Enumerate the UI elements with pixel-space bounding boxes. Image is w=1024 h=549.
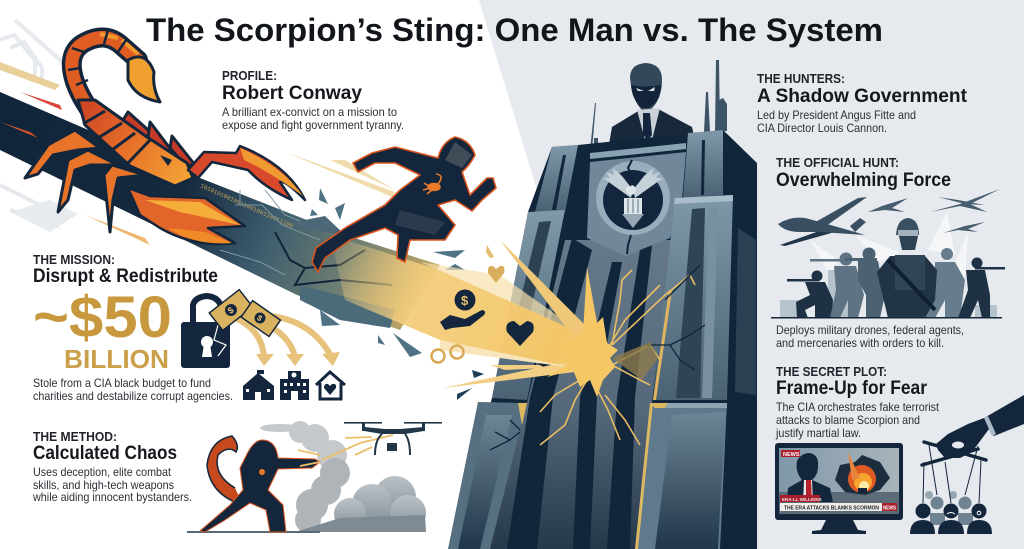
hunters label: THE HUNTERS: — [757, 71, 845, 86]
government seal — [596, 160, 670, 254]
explosion — [835, 452, 890, 495]
antennas — [590, 60, 727, 152]
bottom right block — [635, 403, 727, 549]
icon: school — [243, 370, 274, 400]
mission label: THE MISSION: — [33, 252, 115, 267]
hunt heading: Overwhelming Force — [776, 170, 951, 191]
tower impact cracks — [490, 265, 705, 450]
skyline — [780, 270, 997, 318]
broken shards — [295, 188, 484, 400]
lower third banner — [780, 495, 820, 502]
puppet crowd — [910, 491, 992, 534]
government tower — [448, 60, 757, 549]
icon: quadcopter drone — [344, 422, 442, 455]
tv monitor with news: THE ERA ATTACKS BLAMKS SCORMON — [784, 506, 879, 512]
hunters text block — [757, 71, 968, 135]
method description: while aiding innocent bystanders. — [32, 490, 192, 504]
left upper block — [535, 145, 578, 212]
hunters description: Led by President Angus Fitte and — [757, 108, 916, 122]
official hunt text block — [776, 155, 951, 191]
news tag — [781, 450, 800, 457]
gold rings — [432, 346, 464, 362]
tv monitor with news: NEWS — [883, 506, 896, 512]
scorpion upper claw — [188, 146, 305, 200]
decorative light circuit shapes — [0, 20, 78, 232]
profile description: A brilliant ex-convict on a mission to — [222, 105, 397, 119]
kneeling soldier left — [787, 270, 833, 318]
hunt label: THE OFFICIAL HUNT: — [776, 155, 899, 170]
hand and arm — [936, 395, 1024, 458]
mid soldier 2 — [845, 248, 885, 318]
puppet strings — [923, 445, 981, 503]
scorpion — [25, 30, 305, 244]
gold energy beam — [330, 235, 590, 388]
smoke cloud — [187, 421, 426, 533]
scorpion legs — [25, 112, 195, 232]
mission description: charities and destabilize corrupt agencies. — [33, 389, 233, 403]
hunters description: CIA Director Louis Cannon. — [757, 121, 887, 135]
mission description: Stole from a CIA black budget to fund — [33, 376, 211, 390]
icon: money bills — [209, 290, 280, 337]
icon: arrows to charities — [235, 315, 340, 366]
ground line — [771, 317, 1002, 318]
anchor — [787, 453, 833, 502]
tower dark mass — [448, 130, 757, 549]
scorpion lower claw — [128, 188, 245, 244]
profile label: PROFILE: — [222, 68, 277, 83]
hunt description: and mercenaries with orders to kill. — [776, 336, 944, 350]
fighting figure with scorpion tail — [200, 436, 320, 532]
title: The Scorpion’s Sting: One Man vs. The System — [146, 12, 883, 48]
secret plot text block — [775, 364, 940, 440]
amount unit: BILLION — [64, 344, 169, 374]
bottom left block — [448, 402, 527, 549]
central lower front — [490, 240, 672, 549]
large drone — [778, 197, 867, 246]
profile description: expose and fight government tyranny. — [222, 118, 404, 132]
diagonal data band — [0, 62, 440, 330]
icon: money bills: $ — [255, 313, 264, 324]
icon: gold heart — [488, 266, 504, 283]
icon: dark heart — [506, 321, 534, 346]
mission heading: Disrupt & Redistribute — [33, 266, 218, 287]
band crack — [275, 232, 392, 285]
hunt description: Deploys military drones, federal agents, — [776, 323, 964, 337]
control bars — [922, 442, 986, 465]
profile name: Robert Conway — [222, 83, 362, 104]
small drone 3 — [943, 222, 985, 233]
method label: THE METHOD: — [33, 429, 117, 444]
right mid block — [653, 195, 733, 400]
running hooded figure — [312, 137, 496, 272]
profile text block — [222, 68, 404, 132]
tv monitor with news — [775, 443, 903, 534]
soldiers squad — [787, 218, 1005, 318]
right soldier dark — [958, 258, 1005, 318]
central seal panel — [587, 152, 686, 256]
mid soldier 1 — [810, 252, 864, 318]
floating donation icons — [432, 245, 534, 362]
scorpion tail — [68, 30, 138, 135]
central soldier — [877, 218, 937, 318]
plot heading: Frame-Up for Fear — [776, 378, 928, 399]
icon: home with heart — [316, 372, 345, 399]
drones fleet — [778, 189, 1000, 246]
icon: money bills: $ — [226, 305, 236, 316]
scorpion body — [78, 100, 193, 186]
method description: skills, and high-tech weapons — [33, 478, 174, 492]
plot label: THE SECRET PLOT: — [776, 364, 887, 379]
gold gunfire bolts — [298, 435, 393, 466]
wedge crack piece — [612, 342, 658, 380]
binary data stream: 1010101001001100100110011100 — [199, 182, 294, 230]
impact burst — [547, 267, 618, 397]
small drone 1 — [868, 198, 908, 212]
chest scorpion emblem — [423, 174, 441, 194]
amount: ~$50 — [33, 285, 172, 350]
scorpion stinger — [128, 57, 160, 102]
method text block — [32, 429, 192, 504]
shadow figure — [608, 63, 694, 150]
puppet master hand and marionette crowd — [910, 395, 1024, 534]
tv monitor with news: NEWS — [783, 452, 800, 458]
mission text block — [33, 252, 233, 403]
right upper block — [683, 130, 723, 198]
icon: hand with coin: $ — [461, 293, 469, 308]
method heading: Calculated Chaos — [33, 443, 177, 464]
tv monitor with news: ERA-LL WILLIONS — [782, 497, 822, 502]
small drone 2 — [930, 189, 1000, 212]
searchlight beams — [810, 212, 968, 280]
plot description: attacks to blame Scorpion and — [776, 413, 920, 427]
plot description: The CIA orchestrates fake terrorist — [776, 400, 940, 414]
icon: broken padlock — [181, 296, 230, 368]
icon: hospital — [280, 371, 309, 400]
left mid block — [492, 210, 565, 400]
plot description: justify martial law. — [775, 426, 861, 440]
method description: Uses deception, elite combat — [33, 465, 172, 479]
hunters heading: A Shadow Government — [757, 86, 968, 107]
right soldier light — [925, 248, 965, 318]
right window side — [735, 228, 756, 395]
